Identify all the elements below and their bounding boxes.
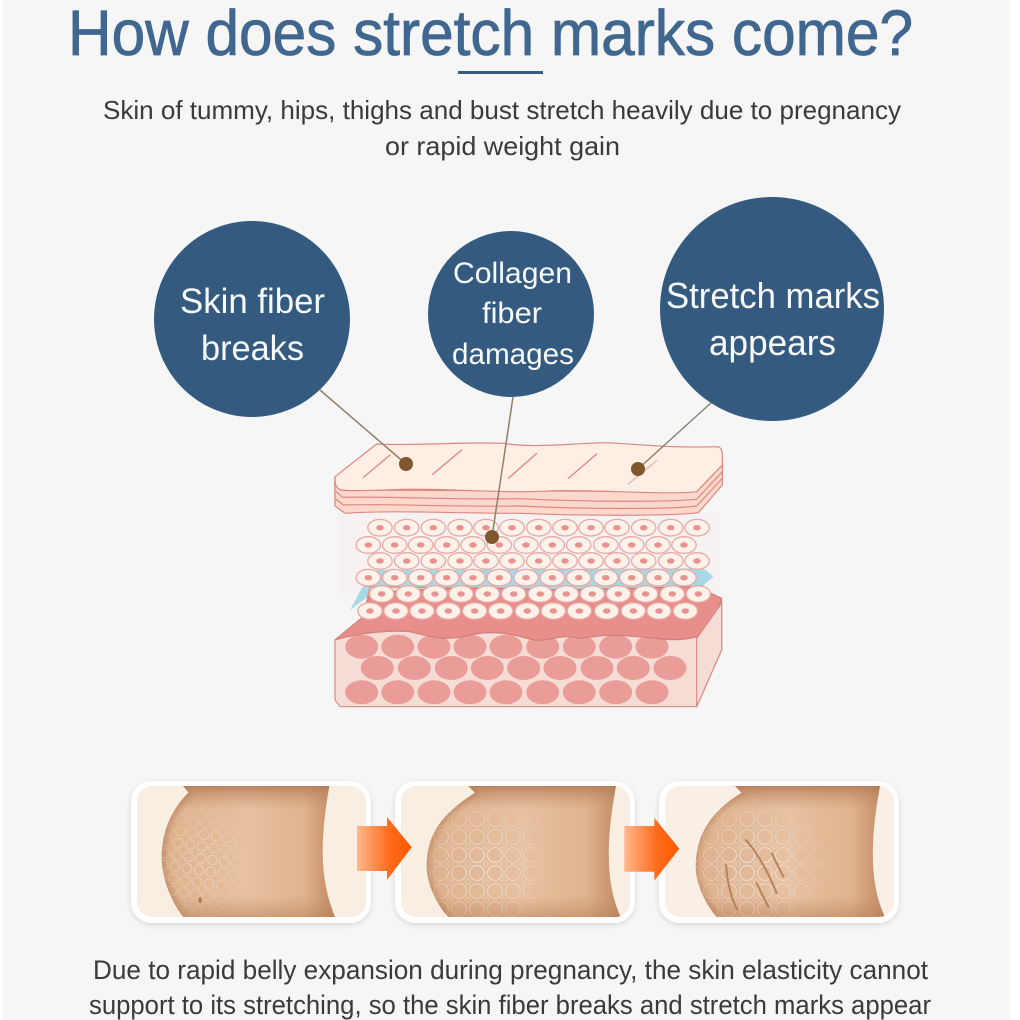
skin layers diagram — [335, 443, 722, 707]
panel: belly stage 2 — [395, 781, 635, 923]
stretch marks — [726, 840, 783, 910]
stretch scratches — [363, 450, 657, 484]
callout: skin fiber breaks: Skin fiber — [180, 282, 325, 321]
dermis surface — [335, 587, 722, 640]
callout: collagen fiber damages: Collagen — [453, 257, 572, 290]
stacked skin sheets — [335, 443, 722, 515]
fat cells — [345, 635, 686, 704]
callout: collagen fiber damages: damages — [452, 338, 574, 371]
fat block — [335, 587, 722, 707]
callout: skin fiber breaks: breaks — [201, 329, 304, 368]
callout: stretch marks appears: Stretch marks — [666, 275, 880, 316]
blue fluid band — [350, 568, 713, 610]
closing text: support to its stretching, so the skin fiber breaks and stretch marks appear — [89, 990, 931, 1020]
intro text: Skin of tummy, hips, thighs and bust stretch heavily due to pregnancy — [103, 95, 901, 125]
intro text: or rapid weight gain — [385, 131, 620, 161]
epidermis cell rows — [356, 519, 710, 619]
callout: collagen fiber damages: fiber — [482, 297, 542, 330]
callout: stretch marks appears — [631, 197, 884, 476]
closing text: Due to rapid belly expansion during pregnancy, the skin elasticity cannot — [93, 955, 929, 985]
callout: skin fiber breaks — [154, 221, 413, 471]
closing text — [89, 955, 931, 1020]
intro text — [103, 95, 901, 161]
panel: belly stage 3 — [659, 781, 899, 923]
callout: stretch marks appears: appears — [709, 322, 836, 363]
panel: belly stage 1 — [131, 781, 371, 923]
arrow: stage 1 to stage 2 — [357, 817, 412, 880]
soft tissue backdrop — [337, 513, 720, 593]
arrow: stage 2 to stage 3 — [624, 818, 679, 881]
callout: collagen fiber damages — [428, 231, 594, 544]
block side face — [697, 603, 722, 707]
